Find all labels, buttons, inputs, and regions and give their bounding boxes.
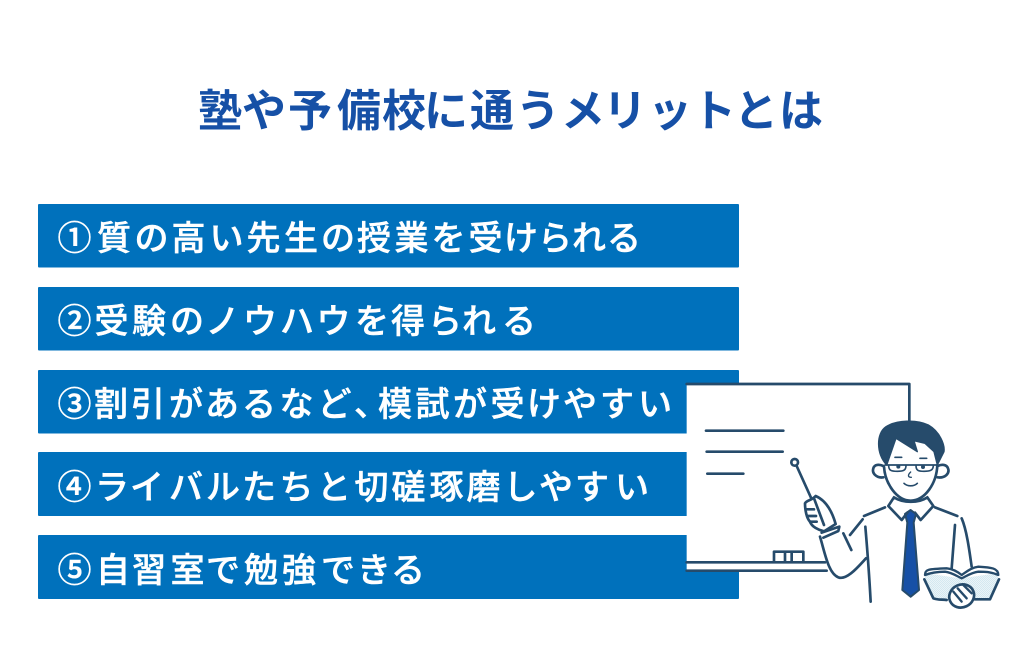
body: shirt and arm [820,507,972,602]
hand [805,496,836,531]
panel: merit 4: ④ライバルたちと切磋琢磨しやすい [58,469,649,507]
hand on book [945,580,978,612]
panel: merit 3 [38,370,739,434]
panel: merit 1 [38,204,739,268]
collar [888,497,933,520]
head [873,421,948,501]
pointer [791,459,823,525]
panel: merit 4 [38,452,739,516]
tie [902,510,919,597]
whiteboard [687,384,909,571]
panel: merit 3: ③割引があるなど、模試が受けやすい [58,386,672,424]
list of merits [38,204,739,599]
panel: merit 1: ①質の高い先生の授業を受けられる [58,220,641,258]
illustration: teacher at whiteboard [687,384,999,612]
panel: merit 5 [38,535,739,599]
open book [924,567,999,600]
panel: merit 5: ⑤自習室で勉強できる [58,552,425,590]
panel: merit 2: ②受験のノウハウを得られる [58,303,536,341]
title: 塾や予備校に通うメリットとは [198,87,823,136]
panel: merit 2 [38,287,739,350]
